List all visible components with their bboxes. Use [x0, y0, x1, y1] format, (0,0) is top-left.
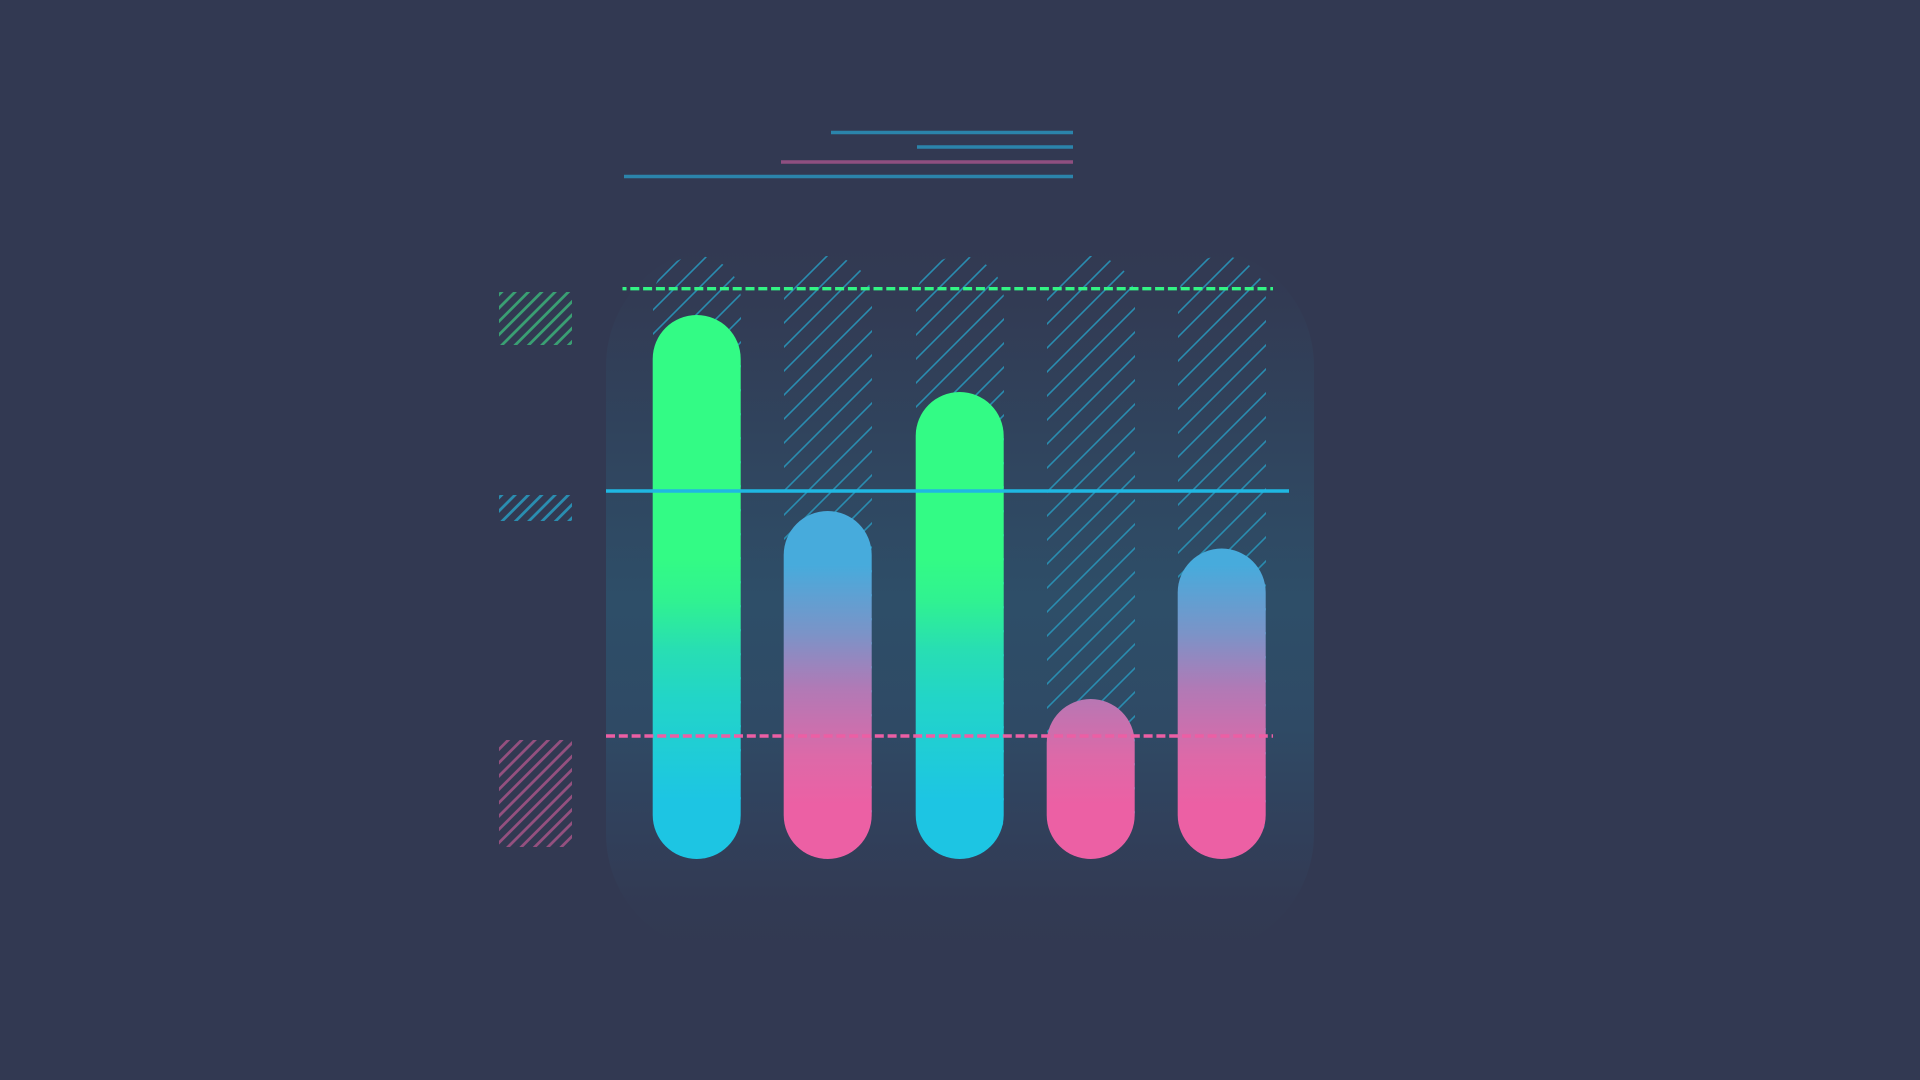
bar 1: green to cyan	[653, 315, 741, 859]
bar 4: blue to pink	[1047, 699, 1135, 859]
bar 2: blue to pink	[784, 511, 872, 859]
pink dashed reference line	[606, 734, 1273, 738]
header placeholder lines	[624, 132, 1073, 176]
bar 3: green to cyan	[916, 392, 1004, 859]
hatched bar capacity backgrounds	[653, 256, 1266, 859]
legend swatch: blue hatch	[499, 495, 572, 521]
legend swatch: green hatch	[499, 292, 572, 345]
blue solid reference line	[606, 489, 1289, 493]
chart panel	[606, 246, 1314, 954]
bar 5: blue to pink	[1178, 548, 1266, 859]
legend swatch: pink hatch	[499, 740, 572, 847]
green dashed reference line	[622, 287, 1273, 290]
